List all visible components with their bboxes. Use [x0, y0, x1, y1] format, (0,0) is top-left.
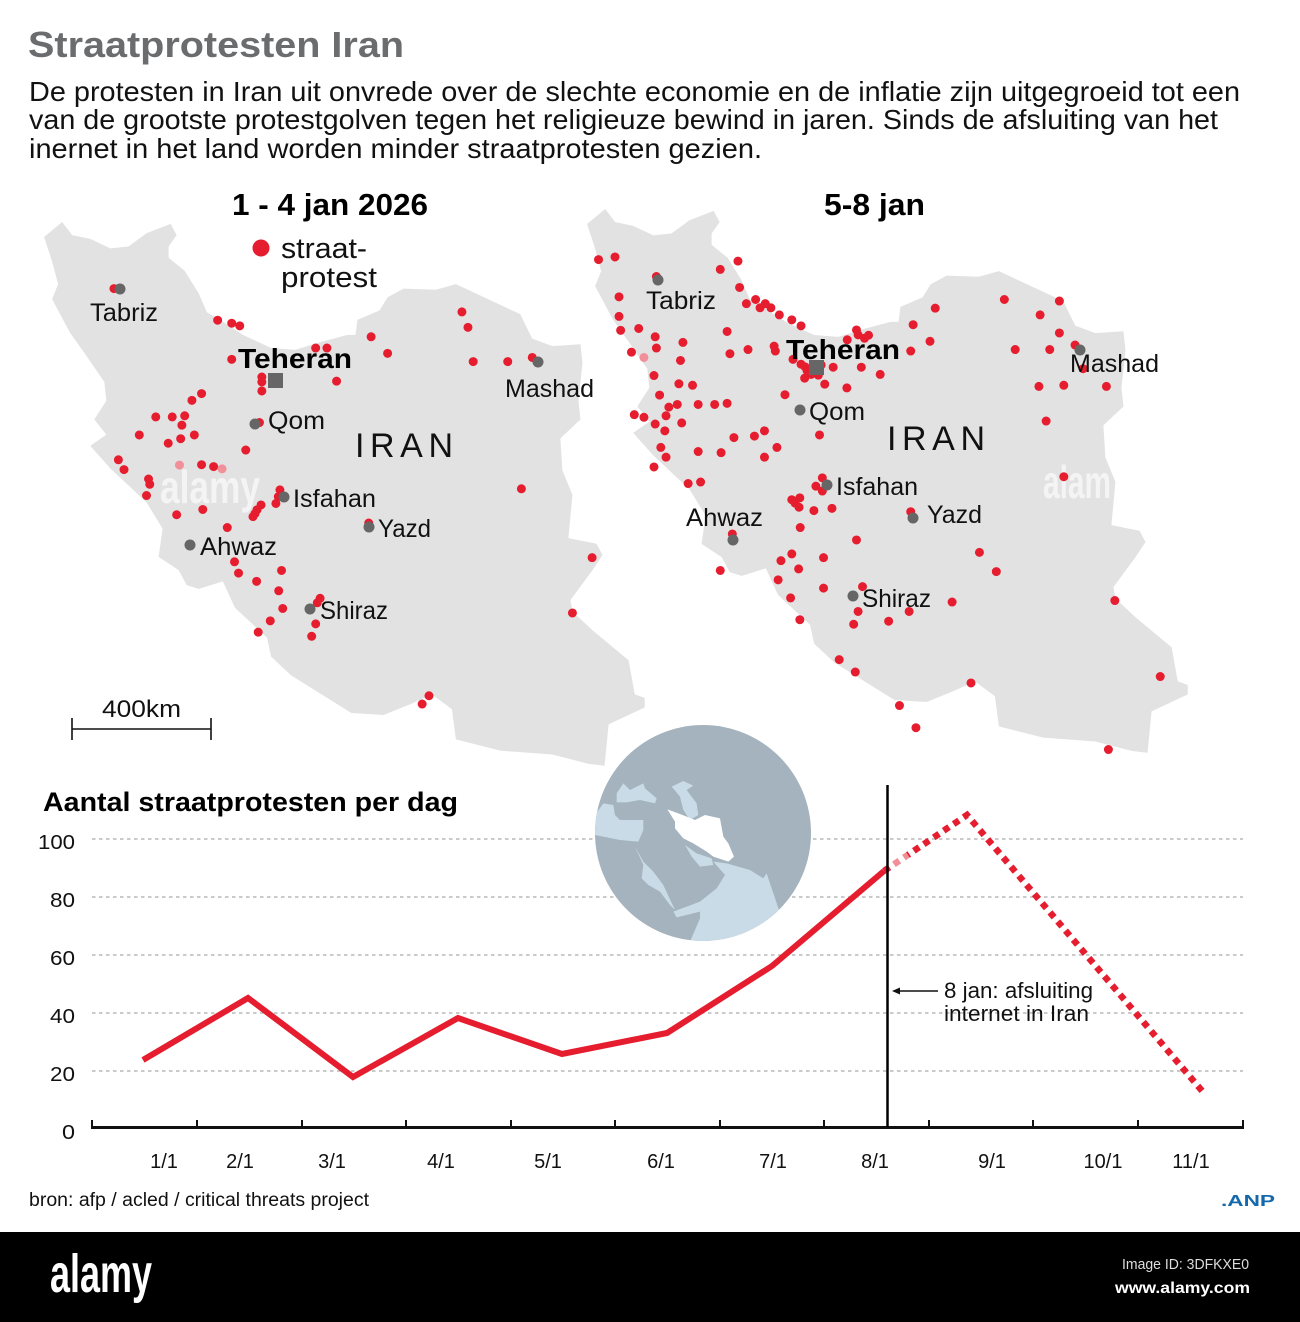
watermark footer bar: alamy	[50, 1244, 152, 1304]
watermark footer bar	[0, 1232, 1300, 1322]
city labels 1-4 jan: Ahwaz	[200, 533, 277, 561]
city labels 5-8 jan	[646, 287, 1159, 613]
legend: straatprotest: protest	[281, 262, 377, 294]
city labels 1-4 jan: Mashad	[505, 375, 594, 403]
map heading 5-8 jan: 5-8 jan	[824, 187, 925, 222]
source: bron: afp / acled / critical threats project	[29, 1190, 370, 1211]
x axis labels: 2/1	[226, 1151, 254, 1173]
protest dots 5-8 jan	[599, 257, 1160, 750]
intro text: van de grootste protestgolven tegen het religieuze bewind in jaren. Sinds de afsluiting van het	[29, 104, 1218, 135]
city labels 1-4 jan: Yazd	[378, 515, 431, 543]
city labels 5-8 jan: Yazd	[927, 501, 982, 529]
city labels 1-4 jan: IRAN	[355, 427, 453, 465]
legend: straatprotest: straat-	[281, 233, 367, 265]
callout: internet shutdown: internet in Iran	[944, 1001, 1089, 1026]
x axis labels: 7/1	[759, 1151, 787, 1173]
callout: internet shutdown: 8 jan: afsluiting	[944, 978, 1093, 1003]
y axis labels: 0	[62, 1122, 75, 1144]
y axis labels: 100	[38, 832, 75, 854]
y axis labels	[38, 832, 75, 1144]
y axis labels: 20	[50, 1064, 75, 1086]
x axis with ticks	[91, 1120, 1244, 1128]
city labels 5-8 jan: Tabriz	[646, 287, 716, 315]
locator globe	[595, 725, 811, 942]
y axis labels: 40	[50, 1006, 75, 1028]
scale bar	[72, 696, 211, 740]
intro text	[29, 76, 1240, 164]
callout: internet shutdown	[892, 978, 1093, 1026]
protest dots 1-4 jan	[114, 289, 592, 704]
faded start of dotted line	[891, 855, 908, 866]
x axis labels: 10/1	[1084, 1151, 1122, 1173]
city markers 1-4 jan	[114, 284, 544, 614]
x axis labels: 4/1	[427, 1151, 455, 1173]
city labels 1-4 jan: Qom	[268, 407, 325, 435]
map shape: Iran 5-8 jan	[587, 209, 1188, 753]
ANP logo: .ANP	[1221, 1193, 1275, 1210]
city labels 1-4 jan: Teheran	[238, 343, 352, 374]
city labels 1-4 jan: Isfahan	[293, 485, 376, 513]
watermark on map 1: alamy	[160, 461, 260, 513]
y axis labels: 60	[50, 948, 75, 970]
vertical marker line	[886, 785, 889, 1127]
chart heading: Aantal straatprotesten per dag	[43, 787, 458, 817]
chart gridlines	[92, 839, 1243, 1071]
map: 5-8 jan	[587, 209, 1188, 753]
watermark footer bar: Image ID: 3DFKXE0	[1122, 1256, 1249, 1273]
x axis labels: 3/1	[318, 1151, 346, 1173]
title: Straatprotesten Iran	[28, 24, 404, 65]
city labels 5-8 jan: Teheran	[786, 334, 900, 365]
city labels 5-8 jan: IRAN	[887, 420, 985, 458]
city labels 5-8 jan: Qom	[809, 398, 865, 426]
x axis labels: 8/1	[861, 1151, 889, 1173]
line chart: protests per day (solid)	[143, 871, 884, 1077]
intro text: De protesten in Iran uit onvrede over de slechte economie en de inflatie zijn uitgegroeid tot een	[29, 76, 1240, 107]
line chart: protests after shutdown (dotted)	[884, 815, 1203, 1092]
intro text: inernet in het land worden minder straatprotesten gezien.	[29, 133, 762, 164]
watermark on map 2: alam	[1043, 456, 1111, 508]
y axis labels: 80	[50, 890, 75, 912]
city labels 5-8 jan: Isfahan	[836, 473, 918, 501]
x axis labels	[150, 1151, 1210, 1173]
city labels 5-8 jan: Ahwaz	[686, 504, 763, 532]
city labels 1-4 jan	[90, 299, 594, 625]
map shape: Iran 1-4 jan	[44, 222, 645, 766]
x axis labels: 9/1	[978, 1151, 1006, 1173]
city labels 5-8 jan: Shiraz	[862, 585, 931, 613]
city labels 1-4 jan: Shiraz	[320, 597, 388, 625]
city labels 1-4 jan: Tabriz	[90, 299, 158, 327]
x axis labels: 1/1	[150, 1151, 178, 1173]
x axis labels: 5/1	[534, 1151, 562, 1173]
city markers 5-8 jan	[652, 274, 1086, 602]
x axis labels: 11/1	[1172, 1151, 1210, 1173]
map heading 1-4 jan: 1 - 4 jan 2026	[232, 187, 428, 222]
scale bar: 400km	[102, 696, 181, 723]
x axis labels: 6/1	[647, 1151, 675, 1173]
map: 1-4 jan	[44, 222, 645, 766]
legend: straatprotest	[252, 233, 377, 294]
watermark footer bar: www.alamy.com	[1114, 1280, 1250, 1297]
city labels 5-8 jan: Mashad	[1070, 350, 1159, 378]
